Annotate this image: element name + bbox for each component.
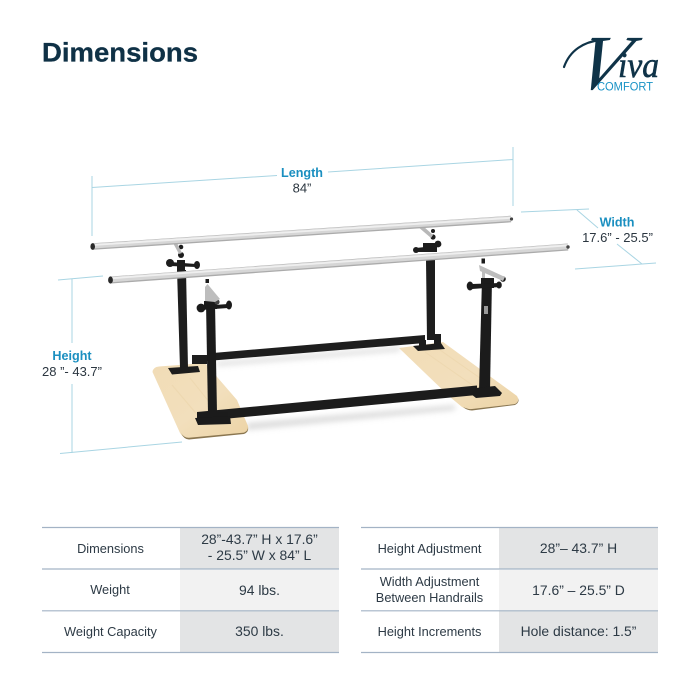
row values — [521, 540, 637, 639]
dimension: height — [42, 276, 182, 454]
back left post — [166, 245, 200, 374]
front left post — [195, 279, 232, 425]
dimension: length: 84” — [293, 180, 311, 196]
rear crossbar — [192, 335, 425, 364]
dimension: height: Height — [52, 349, 92, 363]
back right rail bracket — [417, 226, 433, 238]
right wooden base — [399, 342, 519, 410]
row labels — [64, 541, 158, 639]
front crossbar — [197, 386, 477, 422]
dimension: height: 28 ”- 43.7” — [42, 364, 102, 379]
dimension: length — [92, 147, 513, 236]
row values: 350 lbs. — [235, 623, 284, 639]
row values: 28”– 43.7” H — [540, 540, 617, 556]
row labels: Height Adjustment — [378, 541, 482, 556]
row rules — [361, 528, 658, 652]
back right post — [413, 229, 445, 351]
dimension: width: Width — [600, 216, 634, 230]
row labels — [376, 541, 483, 639]
logo: Viva Comfort: COMFORT — [597, 82, 653, 94]
row labels: Between Handrails — [376, 590, 483, 605]
front left rail bracket — [205, 284, 220, 302]
row labels: Weight — [90, 582, 130, 597]
title: Dimensions — [42, 38, 198, 68]
logo: Viva Comfort: iva — [618, 45, 659, 85]
dimension: width: 17.6” - 25.5” — [582, 230, 653, 245]
front right rail bracket — [479, 265, 505, 281]
back left rail bracket — [173, 243, 182, 254]
small label on post — [484, 306, 488, 314]
value cells — [499, 528, 658, 569]
dimension: length: Length — [281, 166, 323, 180]
row values — [201, 531, 318, 639]
front rail — [111, 245, 568, 280]
back rail — [93, 218, 511, 246]
row values: 28”-43.7” H x 17.6” — [201, 531, 318, 547]
row values: 17.6” – 25.5” D — [532, 582, 625, 598]
dimension: width — [521, 209, 656, 269]
logo: Viva Comfort: V — [565, 21, 649, 107]
value cells — [180, 528, 339, 569]
floor shadows — [217, 347, 455, 430]
row rules — [42, 528, 339, 652]
row labels: Weight Capacity — [64, 624, 158, 639]
row labels: Dimensions — [77, 541, 144, 556]
row labels: Height Increments — [378, 624, 481, 639]
front right post — [467, 258, 506, 398]
front rail end caps — [108, 276, 113, 284]
table: right — [361, 528, 658, 652]
row values: 94 lbs. — [239, 582, 280, 598]
row values: - 25.5” W x 84” L — [208, 547, 311, 563]
parallel bars product illustration — [90, 217, 570, 440]
left wooden base — [152, 363, 248, 440]
row values: Hole distance: 1.5” — [521, 623, 637, 639]
table: left — [42, 528, 339, 652]
row labels: Width Adjustment — [380, 574, 480, 589]
back rail end caps — [90, 243, 95, 250]
